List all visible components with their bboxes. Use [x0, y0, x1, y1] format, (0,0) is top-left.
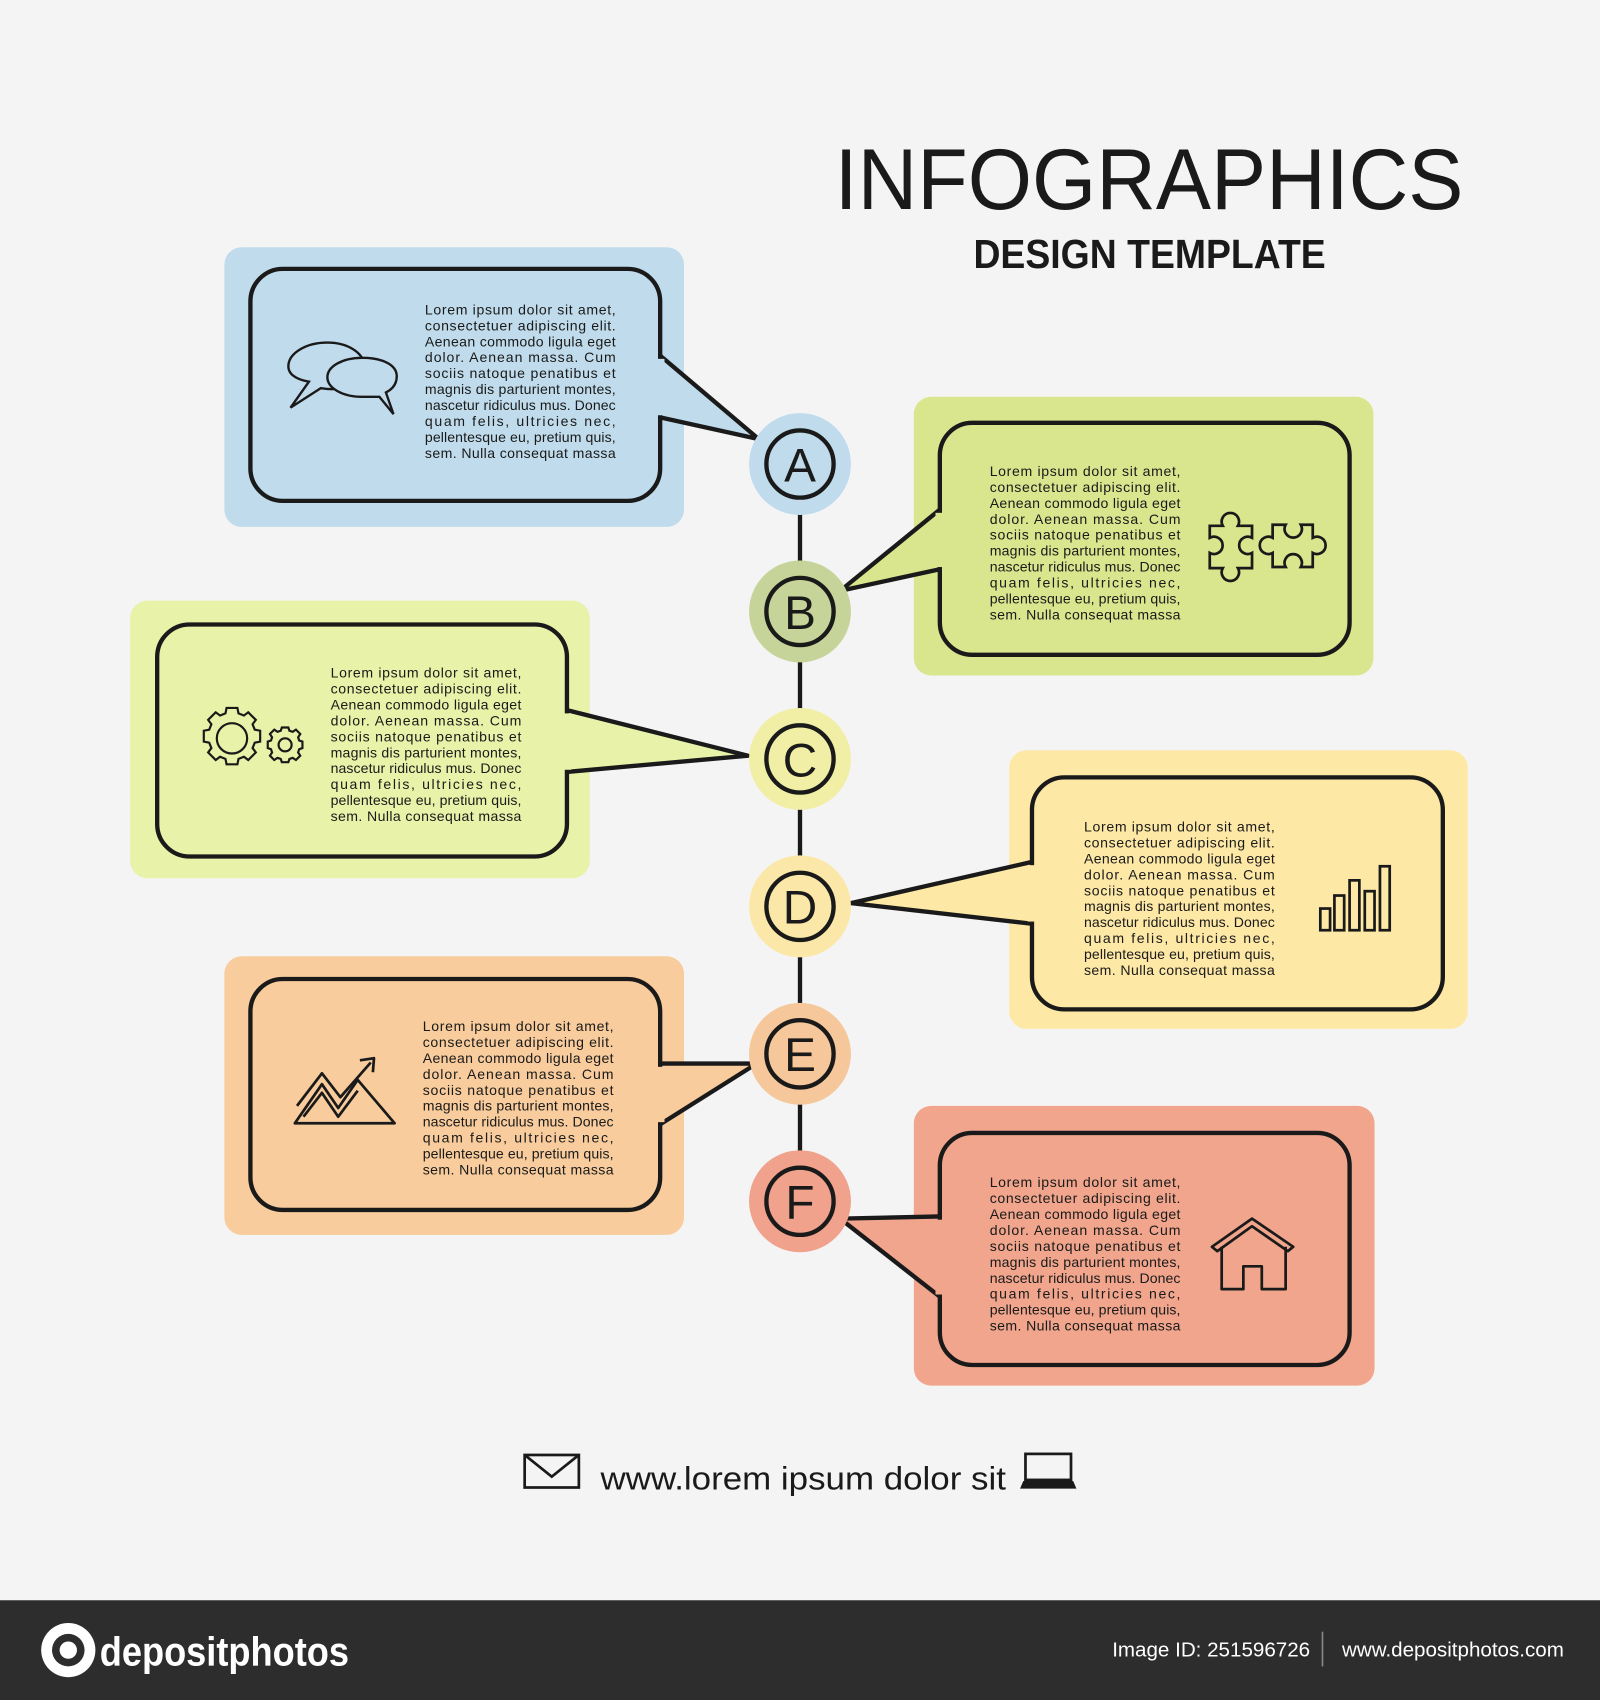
footer contact [525, 1454, 1076, 1497]
icon: chat bubbles [288, 343, 397, 414]
text block C: Aenean commodo ligula eget [331, 696, 521, 712]
text block E [423, 1018, 614, 1177]
panel A [224, 247, 759, 527]
text block E: quam felis, ultricies nec, [423, 1130, 614, 1146]
watermark bar [0, 1600, 1600, 1700]
text block A: magnis dis parturient montes, [425, 381, 616, 397]
icon: gears [204, 708, 302, 767]
footer contact: www.lorem ipsum dolor sit [599, 1461, 1006, 1497]
step markers A-F: C [783, 734, 817, 787]
text block B: sem. Nulla consequat massa [990, 606, 1181, 622]
text block B: dolor. Aenean massa. Cum [990, 511, 1180, 527]
text block C: sociis natoque penatibus et [331, 728, 521, 744]
text block B: Aenean commodo ligula eget [990, 495, 1181, 511]
panel F [840, 1106, 1375, 1386]
text block E: pellentesque eu, pretium quis, [423, 1146, 614, 1162]
text block A: consectetuer adipiscing elit. [425, 317, 616, 333]
text block D: sociis natoque penatibus et [1084, 882, 1275, 898]
text block E: Aenean commodo ligula eget [423, 1050, 614, 1066]
timeline spine [798, 464, 802, 1201]
step markers A-F: E [784, 1029, 816, 1082]
text block F: quam felis, ultricies nec, [990, 1286, 1180, 1302]
text block D: pellentesque eu, pretium quis, [1084, 946, 1275, 962]
text block B: Lorem ipsum dolor sit amet, [990, 463, 1180, 479]
text block F: dolor. Aenean massa. Cum [990, 1222, 1180, 1238]
step markers A-F: D [783, 882, 817, 935]
watermark bar: www.depositphotos.com [1341, 1639, 1564, 1662]
title [835, 131, 1463, 277]
text block E: Lorem ipsum dolor sit amet, [423, 1018, 614, 1034]
text block F: magnis dis parturient montes, [990, 1254, 1180, 1270]
text block F: Lorem ipsum dolor sit amet, [990, 1174, 1180, 1190]
panel E [224, 956, 757, 1235]
text block D: dolor. Aenean massa. Cum [1084, 866, 1275, 882]
text block A: Lorem ipsum dolor sit amet, [425, 301, 616, 317]
text block C: Lorem ipsum dolor sit amet, [331, 665, 521, 681]
text block C [331, 665, 522, 824]
watermark bar: depositphotos [100, 1628, 349, 1674]
text block B: pellentesque eu, pretium quis, [990, 590, 1180, 606]
text block A: dolor. Aenean massa. Cum [425, 349, 616, 365]
step markers A-F: A [784, 439, 816, 492]
text block A: Aenean commodo ligula eget [425, 333, 616, 349]
text block E: sociis natoque penatibus et [423, 1082, 614, 1098]
text block B: consectetuer adipiscing elit. [990, 479, 1180, 495]
text block D: Lorem ipsum dolor sit amet, [1084, 819, 1275, 835]
text block A: quam felis, ultricies nec, [425, 413, 616, 429]
text block E: sem. Nulla consequat massa [423, 1161, 614, 1177]
text block E: consectetuer adipiscing elit. [423, 1034, 614, 1050]
text block F: consectetuer adipiscing elit. [990, 1190, 1180, 1206]
title: DESIGN TEMPLATE [973, 231, 1326, 277]
text block E: dolor. Aenean massa. Cum [423, 1066, 614, 1082]
icon: house [1212, 1219, 1293, 1289]
text block C: quam felis, ultricies nec, [331, 776, 521, 792]
watermark bar: Image ID: 251596726 [1112, 1639, 1310, 1662]
text block D: consectetuer adipiscing elit. [1084, 835, 1275, 851]
icon: puzzle [1210, 513, 1326, 581]
panel B [840, 397, 1373, 675]
step markers A-F [749, 413, 851, 1252]
text block A: sem. Nulla consequat massa [425, 445, 616, 461]
step markers A-F: F [785, 1177, 815, 1230]
text block D: sem. Nulla consequat massa [1084, 962, 1275, 978]
icon: envelope [525, 1455, 579, 1488]
title: INFOGRAPHICS [835, 131, 1463, 228]
text block B: quam felis, ultricies nec, [990, 575, 1180, 591]
text block B: magnis dis parturient montes, [990, 543, 1180, 559]
icon: trend chart [295, 1058, 395, 1123]
icon: bar chart [1320, 866, 1390, 930]
text block D: magnis dis parturient montes, [1084, 898, 1275, 914]
text block E: nascetur ridiculus mus. Donec [423, 1114, 614, 1130]
text block E: magnis dis parturient montes, [423, 1098, 614, 1114]
text block A [425, 301, 616, 461]
text block F: Aenean commodo ligula eget [990, 1206, 1181, 1222]
text block F [990, 1174, 1181, 1334]
panel D [851, 750, 1468, 1029]
text block A: nascetur ridiculus mus. Donec [425, 397, 616, 413]
text block B: nascetur ridiculus mus. Donec [990, 559, 1180, 575]
text block B: sociis natoque penatibus et [990, 527, 1181, 543]
text block C: nascetur ridiculus mus. Donec [331, 760, 521, 776]
text block F: sociis natoque penatibus et [990, 1238, 1181, 1254]
text block B [990, 463, 1181, 622]
text block C: sem. Nulla consequat massa [331, 808, 522, 824]
text block A: sociis natoque penatibus et [425, 365, 616, 381]
text block C: magnis dis parturient montes, [331, 744, 521, 760]
text block D: Aenean commodo ligula eget [1084, 850, 1275, 866]
text block A: pellentesque eu, pretium quis, [425, 429, 616, 445]
text block C: dolor. Aenean massa. Cum [331, 712, 521, 728]
text block D: quam felis, ultricies nec, [1084, 930, 1275, 946]
text block D [1084, 819, 1275, 978]
text block F: sem. Nulla consequat massa [990, 1318, 1181, 1334]
text block F: nascetur ridiculus mus. Donec [990, 1270, 1180, 1286]
panel C [130, 601, 748, 878]
text block F: pellentesque eu, pretium quis, [990, 1302, 1180, 1318]
text block C: pellentesque eu, pretium quis, [331, 792, 521, 808]
step markers A-F: B [784, 587, 816, 640]
text block C: consectetuer adipiscing elit. [331, 681, 521, 697]
text block D: nascetur ridiculus mus. Donec [1084, 914, 1275, 930]
icon: laptop [1020, 1454, 1076, 1489]
